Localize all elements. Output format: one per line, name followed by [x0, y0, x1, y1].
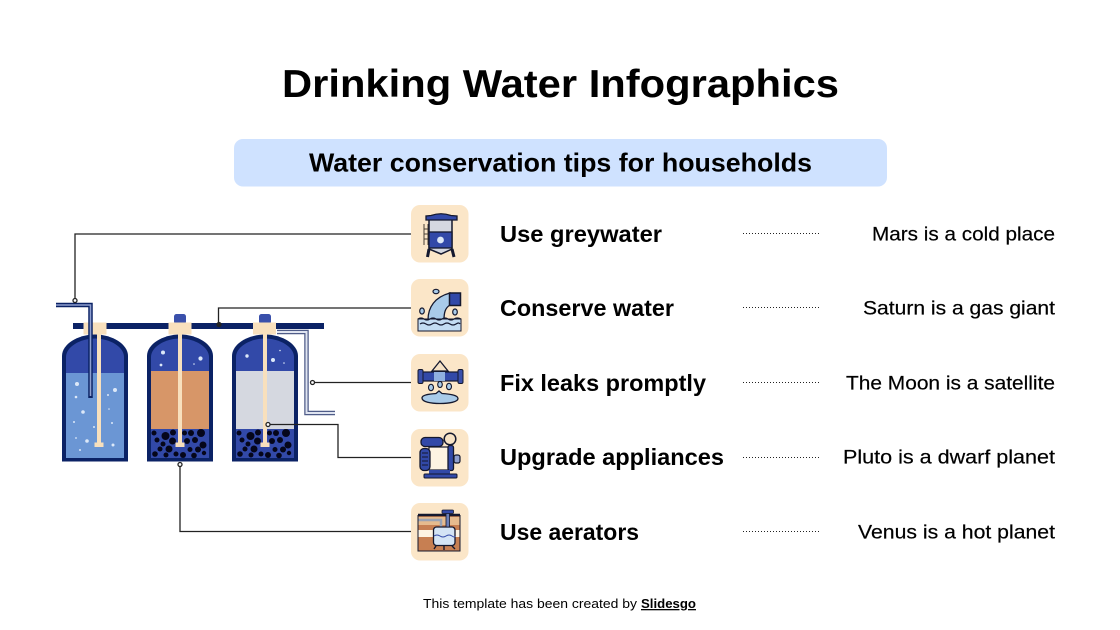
connector lines — [75, 234, 411, 532]
icon: water tank — [411, 205, 468, 262]
row descriptions: The Moon is a satellite — [846, 372, 1055, 394]
row descriptions — [843, 224, 1056, 544]
tank 3 — [232, 334, 298, 462]
footer credit: Slidesgo — [641, 596, 696, 611]
footer credit: This template has been created by — [423, 596, 638, 611]
dotted leaders — [743, 234, 820, 532]
valve caps — [174, 314, 271, 324]
inlet pipe — [56, 305, 90, 398]
row descriptions: Saturn is a gas giant — [863, 298, 1056, 320]
icon: water pouring — [411, 279, 468, 336]
row descriptions: Mars is a cold place — [872, 224, 1055, 246]
row labels: Use greywater — [500, 221, 662, 247]
row labels: Conserve water — [500, 295, 674, 321]
row labels — [500, 221, 724, 545]
title: Drinking Water Infographics — [282, 63, 839, 106]
subtitle banner — [234, 139, 887, 186]
tank 2 — [147, 334, 213, 462]
row labels: Fix leaks promptly — [500, 370, 706, 396]
icon: underground tank — [411, 503, 468, 560]
row descriptions: Venus is a hot planet — [858, 522, 1056, 544]
icon: pump — [411, 429, 468, 486]
subtitle banner: Water conservation tips for households — [309, 148, 812, 178]
header bar — [73, 323, 324, 329]
row descriptions: Pluto is a dwarf planet — [843, 446, 1056, 468]
connector end dots — [73, 298, 314, 466]
tank 1 — [62, 334, 128, 462]
icon: leaking pipe — [411, 354, 468, 412]
row labels: Use aerators — [500, 519, 639, 545]
outlet pipe — [277, 332, 335, 413]
water filtration tanks — [56, 305, 335, 462]
row labels: Upgrade appliances — [500, 444, 724, 470]
tank collars — [84, 322, 276, 334]
